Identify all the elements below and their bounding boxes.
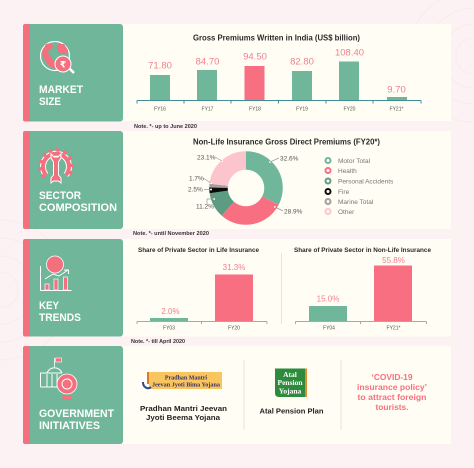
bar chart: gross premiums: 71.80 [148, 60, 172, 72]
donut labels: 11.2% [196, 204, 214, 210]
callout: covid-19 insurance policy: insurance policy’ [357, 383, 427, 392]
legend: Marine Total [338, 199, 374, 206]
bar chart: gross premiums: 82.80 [290, 56, 314, 68]
donut labels: 23.1% [197, 154, 216, 162]
bar chart: gross premiums: FY18 [249, 106, 261, 112]
bar chart: gross premiums: 9.70 [387, 84, 406, 96]
text: Pradhan Mantri Jeevan Jyoti Beema Yojana: Pradhan Mantri Jeevan [140, 404, 227, 413]
note: sector composition: Note. *- until November 2020 [133, 231, 209, 237]
panel: key trends [23, 239, 451, 336]
chart title: gross premiums: Gross Premiums Written in India (US$ billion) [193, 34, 360, 42]
chart: private share in non-life insurance [294, 247, 431, 332]
logo: Atal Pension Yojana: Pension [277, 378, 303, 387]
donut labels [188, 154, 303, 216]
logo: Pradhan Mantri Jeevan Jyoti Bima Yojana: Jeevan Jyoti Bima Yojana [152, 382, 220, 388]
chart: private share in non-life insurance: FY21* [387, 326, 400, 332]
chart: private share in non-life insurance: Share of Private Sector in Non-Life Insurance [294, 247, 431, 254]
note: market size: Note. *- up to June 2020 [134, 124, 197, 130]
callout: covid-19 insurance policy: tourists. [376, 403, 408, 412]
chart: private share in life insurance [137, 247, 267, 332]
legend [326, 158, 394, 216]
donut chart [210, 160, 276, 216]
chart: private share in non-life insurance: 55.8% [382, 256, 405, 265]
chart title: non-life premiums: Non-Life Insurance Gross Direct Premiums (FY20*) [193, 138, 380, 146]
text: Pradhan Mantri Jeevan Jyoti Beema Yojana: Jyoti Beema Yojana [146, 413, 221, 422]
logo: Atal Pension Yojana: Atal [283, 370, 297, 379]
logo: Pradhan Mantri Jeevan Jyoti Bima Yojana [143, 372, 222, 389]
chart: private share in life insurance: FY20 [228, 326, 240, 332]
heading: sector composition: SECTOR [39, 190, 81, 202]
chart: private share in life insurance: 2.0% [161, 307, 180, 316]
logo: Atal Pension Yojana [275, 368, 307, 397]
heading: market size: MARKET [39, 84, 83, 96]
chart: private share in non-life insurance: FY04 [323, 326, 335, 332]
callout: covid-19 insurance policy: to attract foreign [358, 393, 427, 402]
heading: market size: SIZE [39, 96, 61, 108]
legend: Other [338, 209, 355, 216]
logo: Pradhan Mantri Jeevan Jyoti Bima Yojana: Pradhan Mantri [165, 376, 207, 382]
callout: covid-19 insurance policy: ‘COVID-19 [372, 373, 413, 382]
heading: government initiatives: INITIATIVES [39, 420, 100, 432]
bar chart: gross premiums: FY17 [202, 106, 214, 112]
legend: Personal Accidents [338, 178, 394, 186]
icon: globe with rupee [40, 42, 74, 73]
bar chart: gross premiums: 94.50 [243, 52, 267, 62]
panel: sector composition [23, 131, 451, 229]
heading: sector composition: COMPOSITION [39, 202, 117, 214]
donut labels: 2.5% [188, 186, 203, 194]
chart: private share in life insurance: Share of Private Sector in Life Insurance [138, 247, 259, 254]
legend: Motor Total [338, 158, 371, 165]
heading: government initiatives: GOVERNMENT [39, 408, 114, 420]
bar chart: gross premiums: FY20 [344, 106, 356, 112]
donut labels: 28.9% [284, 208, 303, 216]
legend: Fire [338, 189, 350, 196]
bar chart: gross premiums: FY16 [154, 106, 166, 112]
heading: key trends: KEY [39, 300, 60, 312]
panel: market size [23, 24, 451, 122]
bar chart: gross premiums: FY19 [296, 106, 308, 112]
icon: government building with bulb [40, 358, 77, 400]
bar chart: gross premiums: 108.40 [335, 48, 364, 58]
chart: private share in life insurance: FY03 [163, 326, 175, 332]
text: Atal Pension Plan: Atal Pension Plan [260, 406, 324, 416]
legend: Health [338, 168, 357, 175]
bar chart: gross premiums [137, 48, 421, 112]
heading: key trends: TRENDS [39, 312, 81, 324]
donut labels: 1.7% [189, 176, 204, 182]
chart: private share in non-life insurance: 15.0% [317, 294, 339, 304]
chart: private share in life insurance: 31.3% [223, 263, 245, 272]
icon: globe with rupee: ₹ [60, 60, 66, 70]
donut labels: 32.6% [280, 156, 299, 162]
icon: trend chart [40, 256, 72, 290]
panel: government initiatives [23, 346, 451, 444]
bar chart: gross premiums: FY21* [390, 106, 403, 112]
logo: Atal Pension Yojana: Yojana [279, 386, 301, 396]
icon: gear and wrench [40, 150, 72, 183]
note: key trends: Note. *- till April 2020 [131, 339, 185, 345]
bar chart: gross premiums: 84.70 [196, 56, 219, 68]
